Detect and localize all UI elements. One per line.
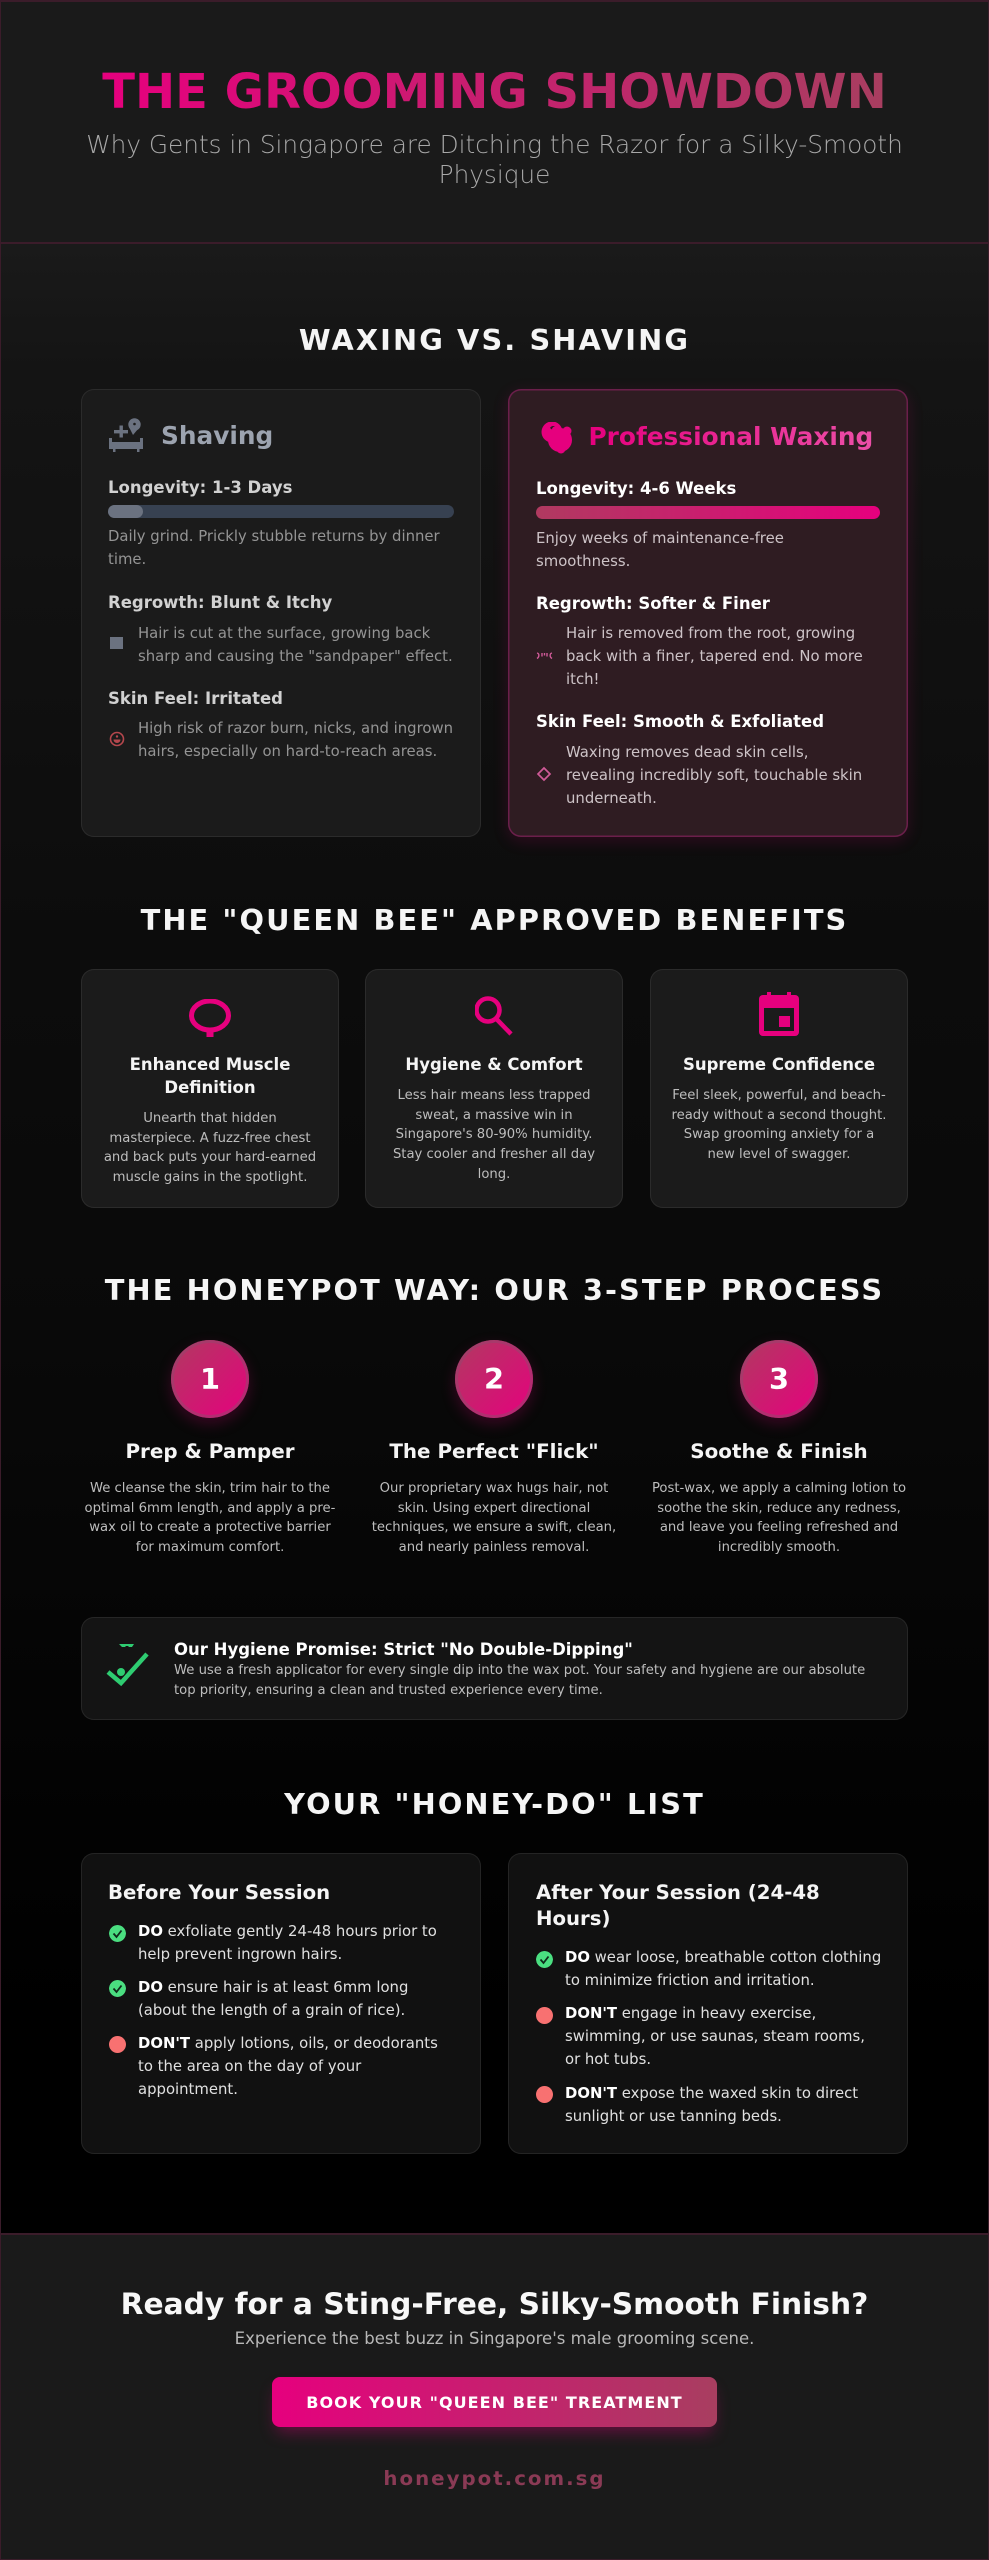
skin feel text — [138, 718, 453, 760]
step 2 text: techniques, we ensure a swift, clean, — [372, 1520, 616, 1535]
step 2 heading: The Perfect "Flick" — [389, 1440, 599, 1462]
panel: before session — [81, 1853, 481, 2154]
dont text: DON'T expose the waxed skin to direct — [565, 2084, 858, 2102]
icon: muscle — [189, 999, 231, 1037]
dont text: DON'T engage in heavy exercise, — [565, 2004, 816, 2022]
dont text: appointment. — [138, 2080, 238, 2098]
confidence text: ready without a second thought. — [671, 1108, 886, 1123]
icon: fine hair — [536, 652, 552, 660]
number badge 1: 1 — [200, 1362, 220, 1396]
regrowth text: back with a finer, tapered end. No more — [566, 647, 863, 665]
longevity bar — [536, 506, 880, 519]
dont text: DON'T apply lotions, oils, or deodorants — [138, 2034, 438, 2052]
panel: shaving — [81, 389, 481, 837]
confidence heading: Supreme Confidence — [683, 1055, 875, 1074]
hygiene text: long. — [478, 1167, 510, 1182]
waxing heading: Professional Waxing — [588, 422, 873, 451]
subtitle — [86, 130, 903, 189]
dont icon — [109, 2036, 126, 2052]
number badge 3 — [740, 1340, 818, 1418]
longevity heading: Longevity: 1-3 Days — [108, 478, 292, 497]
step 3 text — [652, 1481, 906, 1555]
muscle text: masterpiece. A fuzz-free chest — [109, 1131, 311, 1146]
shaving heading: Shaving — [161, 421, 273, 450]
do text — [565, 1946, 881, 1992]
promise text: We use a fresh applicator for every single dip into the wax pot. Your safety and hygiene are our absolute — [174, 1663, 865, 1678]
confidence text: Swap grooming anxiety for a — [684, 1127, 874, 1142]
dont text — [565, 2082, 858, 2128]
number badge 2: 2 — [484, 1362, 504, 1396]
regrowth text: Hair is removed from the root, growing — [566, 624, 855, 642]
number badge 3: 3 — [769, 1362, 789, 1396]
before item 2 — [109, 1978, 408, 2018]
muscle text: Unearth that hidden — [143, 1111, 277, 1126]
footer text: Experience the best buzz in Singapore's male grooming scene. — [235, 2329, 754, 2348]
icon: razor — [109, 418, 143, 452]
after item 2 — [536, 2001, 886, 2071]
icon: check — [106, 1644, 149, 1686]
dont text: or hot tubs. — [565, 2050, 651, 2068]
do text: (about the length of a grain of rice). — [138, 2000, 405, 2018]
dont text — [138, 2034, 438, 2098]
icon: magnifier — [475, 996, 513, 1036]
step 3 — [652, 1340, 906, 1555]
muscle text — [104, 1111, 316, 1185]
skin feel text: hairs, especially on hard-to-reach areas. — [138, 742, 437, 760]
regrowth heading: Regrowth: Blunt & Itchy — [108, 593, 332, 612]
footer heading: Ready for a Sting-Free, Silky-Smooth Finish? — [121, 2286, 868, 2322]
hygiene heading: Hygiene & Comfort — [405, 1055, 583, 1074]
after heading: Hours) — [536, 1907, 610, 1930]
background — [0, 243, 989, 2234]
hygiene text: Stay cooler and fresher all day — [393, 1147, 595, 1162]
hygiene text: sweat, a massive win in — [415, 1108, 573, 1123]
footer — [0, 2233, 989, 2560]
icon: blunt hair — [110, 637, 123, 649]
title: THE GROOMING SHOWDOWN — [102, 64, 887, 120]
icon: diamond — [536, 766, 552, 782]
regrowth text: itch! — [566, 670, 599, 688]
do text — [138, 1978, 408, 2018]
muscle heading: Enhanced Muscle — [130, 1055, 290, 1074]
panel: hygiene — [365, 969, 623, 1208]
header — [0, 0, 989, 244]
longevity text: time. — [108, 550, 146, 568]
skin feel text: underneath. — [566, 788, 657, 806]
dont text: swimming, or use saunas, steam rooms, — [565, 2026, 865, 2044]
step 2 text: and nearly painless removal. — [399, 1540, 589, 1555]
confidence text: Feel sleek, powerful, and beach- — [672, 1088, 886, 1103]
number badge 1 — [171, 1340, 249, 1418]
step 1 heading: Prep & Pamper — [125, 1440, 295, 1462]
hygiene text — [393, 1088, 595, 1182]
longevity text — [108, 527, 440, 568]
panel: hygiene promise — [81, 1617, 908, 1720]
after heading — [536, 1880, 820, 1930]
subtitle: Physique — [439, 160, 550, 189]
heading: process: THE HONEYPOT WAY: OUR 3-STEP PROCESS — [105, 1273, 884, 1307]
dont text: sunlight or use tanning beds. — [565, 2106, 782, 2124]
longevity text: Daily grind. Prickly stubble returns by dinner — [108, 527, 440, 545]
hygiene text: Less hair means less trapped — [398, 1088, 590, 1103]
muscle heading: Definition — [164, 1078, 256, 1097]
regrowth text — [566, 624, 863, 688]
skin feel heading: Skin Feel: Irritated — [108, 689, 283, 708]
hygiene text: Singapore's 80-90% humidity. — [396, 1127, 592, 1142]
before item 3 — [109, 2034, 438, 2098]
icon: calendar — [759, 992, 799, 1036]
do text: DO ensure hair is at least 6mm long — [138, 1978, 408, 1996]
dont text: to the area on the day of your — [138, 2056, 361, 2074]
step 2 — [372, 1340, 616, 1555]
confidence text: new level of swagger. — [708, 1147, 850, 1162]
longevity heading: Longevity: 4-6 Weeks — [536, 479, 736, 498]
step 1 — [85, 1340, 335, 1555]
panel: muscle definition — [81, 969, 339, 1208]
skin feel text: revealing incredibly soft, touchable skin — [566, 766, 862, 784]
step 1 text — [85, 1481, 335, 1555]
longevity text — [536, 529, 784, 570]
longevity bar — [108, 505, 454, 518]
subtitle: Why Gents in Singapore are Ditching the Razor for a Silky-Smooth — [86, 130, 903, 159]
do text — [138, 1922, 437, 1962]
dont icon — [536, 2006, 553, 2024]
do text: DO wear loose, breathable cotton clothing — [565, 1948, 881, 1966]
after item 1 — [536, 1948, 881, 1988]
step 2 text: skin. Using expert directional — [398, 1500, 590, 1516]
step 1 text: We cleanse the skin, trim hair to the — [90, 1481, 330, 1496]
step 3 text: soothe the skin, reduce any redness, — [657, 1500, 901, 1516]
promise text: top priority, ensuring a clean and trusted experience every time. — [174, 1683, 603, 1698]
step 1 text: for maximum comfort. — [136, 1540, 284, 1555]
do icon — [109, 1925, 126, 1942]
promise heading: Our Hygiene Promise: Strict "No Double-Dipping" — [174, 1640, 633, 1659]
step 3 text: Post-wax, we apply a calming lotion to — [652, 1481, 906, 1496]
do icon — [109, 1980, 126, 1997]
step 3 text: and leave you feeling refreshed and — [660, 1520, 898, 1535]
muscle heading — [130, 1055, 290, 1097]
skin feel text: High risk of razor burn, nicks, and ingrown — [138, 718, 453, 736]
panel: after session — [508, 1853, 908, 2154]
do text: to minimize friction and irritation. — [565, 1970, 815, 1988]
panel: confidence — [650, 969, 908, 1208]
step 1 text: wax oil to create a protective barrier — [89, 1520, 331, 1535]
skin feel text — [566, 742, 862, 806]
after heading: After Your Session (24-48 — [536, 1880, 820, 1904]
do icon — [536, 1951, 553, 1968]
bar fill — [108, 505, 143, 518]
regrowth text: Hair is cut at the surface, growing back — [138, 624, 430, 642]
before item 1 — [109, 1922, 437, 1962]
promise text — [174, 1663, 865, 1698]
website: honeypot.com.sg — [383, 2467, 606, 2490]
skin feel text: Waxing removes dead skin cells, — [566, 742, 808, 760]
dont text — [565, 2002, 865, 2070]
longevity text: smoothness. — [536, 552, 630, 570]
heading: honey-do list: YOUR "HONEY-DO" LIST — [284, 1787, 705, 1821]
step 3 heading: Soothe & Finish — [690, 1440, 868, 1462]
step 1 text: optimal 6mm length, and apply a pre- — [85, 1500, 335, 1516]
longevity text: Enjoy weeks of maintenance-free — [536, 529, 784, 547]
dont icon — [536, 2086, 553, 2102]
cta button — [272, 2377, 717, 2427]
step 3 text: incredibly smooth. — [718, 1540, 840, 1555]
panel: professional waxing — [508, 389, 908, 837]
muscle text: muscle gains in the spotlight. — [113, 1170, 307, 1185]
cta button: BOOK YOUR "QUEEN BEE" TREATMENT — [306, 2393, 683, 2412]
regrowth text — [138, 624, 453, 664]
regrowth text: sharp and causing the "sandpaper" effect. — [138, 646, 453, 664]
number badge 2 — [455, 1340, 533, 1418]
heading: benefits: THE "QUEEN BEE" APPROVED BENEFITS — [141, 903, 848, 937]
icon: honey blob — [542, 422, 572, 454]
do text: DO exfoliate gently 24-48 hours prior to — [138, 1922, 437, 1940]
step 2 text: Our proprietary wax hugs hair, not — [380, 1481, 608, 1496]
icon: irritation — [110, 732, 124, 746]
heading: waxing vs shaving: WAXING VS. SHAVING — [299, 323, 690, 357]
before heading: Before Your Session — [108, 1880, 330, 1904]
after item 3 — [536, 2081, 886, 2128]
regrowth heading: Regrowth: Softer & Finer — [536, 594, 770, 613]
step 2 text — [372, 1481, 616, 1555]
confidence text — [671, 1088, 886, 1162]
skin feel heading: Skin Feel: Smooth & Exfoliated — [536, 712, 824, 731]
muscle text: and back puts your hard-earned — [104, 1150, 316, 1165]
do text: help prevent ingrown hairs. — [138, 1944, 342, 1962]
